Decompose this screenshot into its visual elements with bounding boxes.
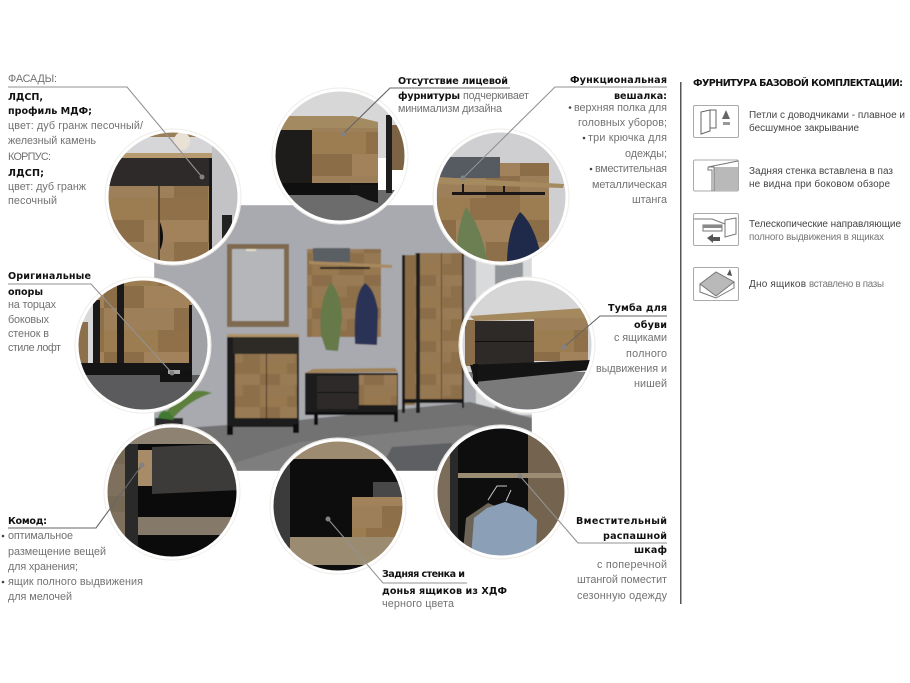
callout: back panel: Задняя стенка и — [382, 569, 465, 580]
circle: wardrobe detail — [434, 425, 568, 560]
back wall text — [749, 166, 893, 190]
callout: legs: Оригинальные — [8, 271, 91, 282]
callout: chest of drawers: оптимальное — [8, 530, 73, 542]
shoe cabinet — [227, 334, 299, 435]
drawer bottom text — [749, 279, 884, 290]
back wall text: не видна при боковом обзоре — [749, 178, 890, 190]
callout: back panel — [326, 516, 507, 610]
tall wardrobe — [402, 253, 464, 413]
callout: coat rack: головных уборов; — [578, 117, 667, 129]
callout: no hardware: подчеркивает — [463, 90, 529, 102]
callout: coat rack: металлическая — [592, 179, 667, 191]
callout: legs: стиле лофт — [8, 342, 61, 354]
callout: coat rack: Функциональная — [570, 75, 667, 86]
rug — [380, 443, 452, 471]
vertical divider — [680, 82, 682, 604]
callout: coat rack — [460, 75, 667, 206]
callout: coat rack: вместительная — [595, 163, 667, 175]
callout: coat rack: три крючка для — [588, 132, 667, 144]
callout: wardrobe: шкаф — [634, 544, 667, 556]
callout: legs — [8, 271, 174, 376]
icon: hinges — [694, 106, 738, 138]
callout: chest of drawers — [2, 462, 145, 603]
callout: coat rack: вешалка: — [614, 91, 667, 102]
callout: no hardware: минимализм дизайна — [398, 103, 502, 115]
callout: facades: ЛДСП; — [8, 168, 44, 179]
callout: wardrobe: Вместительный — [576, 516, 667, 527]
callout: facades: цвет: дуб гранж песочный/ — [8, 120, 143, 132]
circle: front without hardware — [272, 88, 408, 226]
callout: legs: стенок в — [8, 328, 49, 340]
callout: shoe bench: нишей — [634, 378, 667, 390]
callout: chest of drawers: для мелочей — [8, 591, 72, 603]
callout: chest of drawers: для хранения; — [8, 561, 78, 573]
icon: telescopic slides — [694, 214, 738, 246]
callout: wardrobe — [518, 474, 668, 602]
telescopic text — [749, 219, 901, 243]
callout: facades: железный камень — [8, 135, 96, 147]
callout: facades — [8, 73, 204, 207]
panel: basic hardware — [693, 76, 905, 300]
callout: legs: боковых — [8, 314, 50, 326]
callout: facades: КОРПУС: — [8, 151, 51, 163]
circle: coat rack detail — [433, 129, 569, 265]
callout: wardrobe: с поперечной — [597, 559, 667, 571]
callout: shoe bench: выдвижения и — [596, 363, 667, 375]
circle: facade detail — [105, 129, 241, 265]
mirror — [227, 244, 289, 327]
coat rack panel — [307, 248, 392, 351]
callout: chest of drawers: Комод: — [8, 516, 47, 527]
plant — [155, 391, 212, 428]
callout: no hardware: фурнитуры — [398, 90, 460, 102]
circle: chest of drawers detail — [104, 424, 240, 561]
panel heading: ФУРНИТУРА БАЗОВОЙ КОМПЛЕКТАЦИИ: — [693, 76, 903, 89]
drawer bottom text: Дно ящиков — [749, 279, 806, 290]
back wall text: Задняя стенка вставлена в паз — [749, 166, 893, 177]
callout: shoe bench: с ящиками — [614, 332, 667, 344]
bench — [305, 368, 398, 425]
callout: legs: на торцах — [8, 299, 57, 311]
hinges text — [749, 110, 905, 134]
callout: facades: профиль МДФ; — [8, 105, 92, 117]
hinges text: бесшумное закрывание — [749, 122, 859, 134]
infographic — [2, 74, 904, 610]
callout: back panel: донья ящиков из ХДФ — [382, 586, 507, 597]
callout: chest of drawers: ящик полного выдвижения — [8, 576, 143, 588]
callout: legs: опоры — [8, 287, 43, 298]
callout: facades: ФАСАДЫ: — [8, 73, 57, 85]
icon: back wall — [694, 160, 738, 191]
callout: facades: ЛДСП, — [8, 92, 43, 103]
hinges text: Петли с доводчиками - плавное и — [749, 110, 905, 121]
callout: back panel: черного цвета — [382, 598, 454, 610]
callout: no hardware — [340, 76, 529, 136]
callout: shoe bench: обуви — [634, 319, 667, 331]
callout: facades: цвет: дуб гранж — [8, 181, 87, 193]
telescopic text: Телескопические направляющие — [749, 219, 901, 230]
drawer bottom text: вставлено в пазы — [809, 279, 884, 290]
callout: wardrobe: штангой поместит — [577, 574, 667, 586]
room photo — [154, 205, 532, 471]
circle: shoe bench detail — [459, 276, 595, 416]
callout: wardrobe: распашной — [603, 531, 667, 542]
callout: coat rack: штанга — [632, 194, 667, 206]
callout: chest of drawers: размещение вещей — [8, 546, 106, 558]
callout: shoe bench: Тумба для — [608, 302, 667, 314]
callout: facades: песочный — [8, 195, 57, 207]
circle: loft legs detail — [75, 277, 211, 415]
icon: drawer bottom — [694, 268, 738, 300]
telescopic text: полного выдвижения в ящиках — [749, 232, 884, 243]
callout: coat rack: верхняя полка для — [574, 102, 667, 114]
callout: shoe bench: полного — [626, 348, 667, 360]
callout: no hardware: Отсутствие лицевой — [398, 76, 508, 87]
callout: shoe bench — [562, 302, 667, 390]
callout: coat rack: одежды; — [625, 148, 667, 160]
circle: black back panel detail — [270, 438, 406, 574]
callout: wardrobe: сезонную одежду — [577, 590, 668, 602]
